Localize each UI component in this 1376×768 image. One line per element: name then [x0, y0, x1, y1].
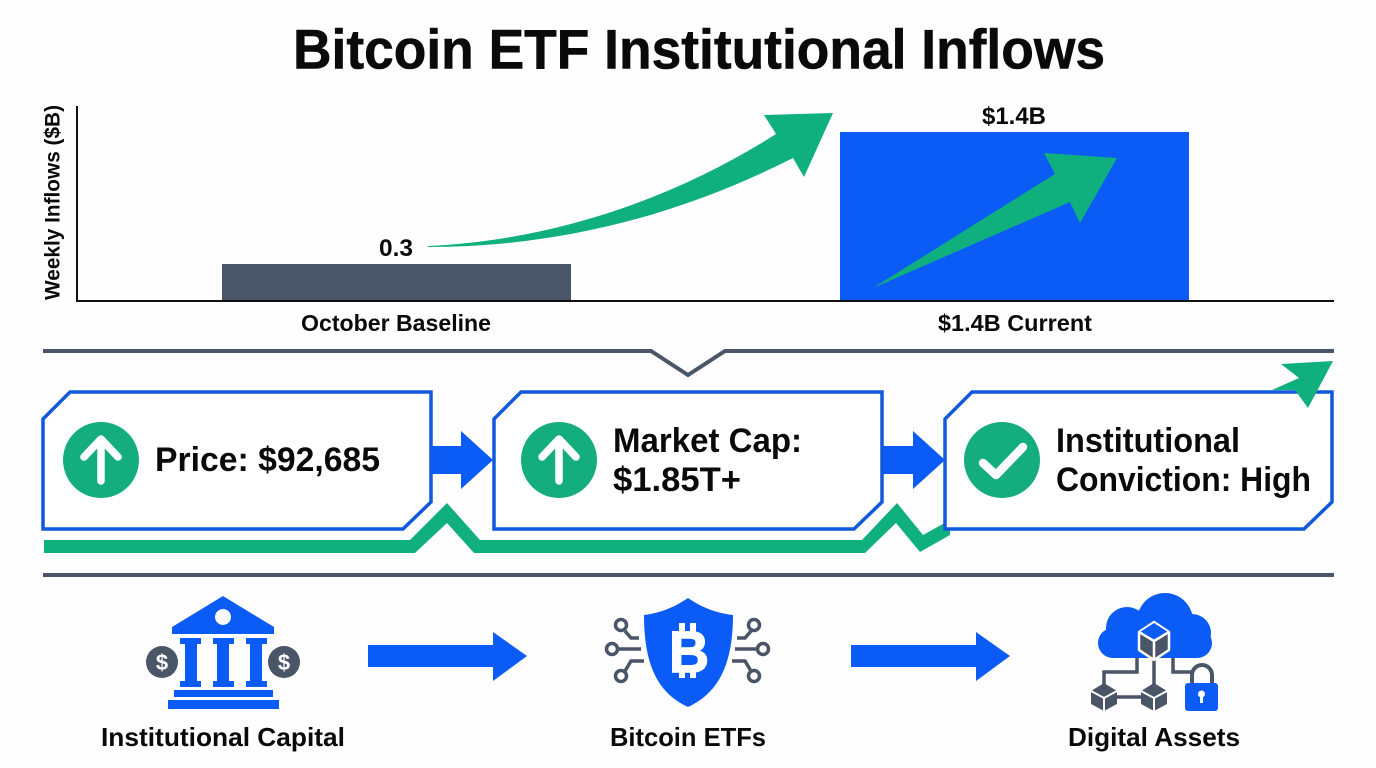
market cap text — [613, 422, 802, 499]
arrow: price to market cap — [431, 431, 493, 489]
arrow: trend arrowhead top right — [1272, 361, 1333, 408]
right cube — [1141, 683, 1167, 711]
icon: bitcoin shield — [606, 598, 768, 707]
price text: Price: $92,685 — [155, 441, 380, 479]
arrow: ETFs to digital assets — [851, 632, 1010, 681]
card outline — [494, 392, 882, 529]
icon: check mark — [964, 422, 1040, 498]
coin right — [268, 646, 300, 678]
shield — [644, 598, 733, 707]
panel: institutional conviction — [945, 392, 1332, 529]
category label: October Baseline: October Baseline — [301, 310, 491, 336]
icon: institutional bank with coins — [146, 596, 300, 709]
coin left: $ — [156, 650, 168, 675]
bar: current — [840, 132, 1189, 301]
category label: $1.4B Current: $1.4B Current — [938, 310, 1092, 336]
y axis label: Weekly Inflows ($B) — [42, 105, 64, 300]
bank steps — [168, 690, 279, 709]
bank columns — [180, 638, 267, 687]
bank roof — [172, 596, 274, 634]
conviction text: Institutional — [1056, 422, 1240, 460]
central cube — [1139, 622, 1169, 660]
arrow: curved growth arrow — [428, 113, 833, 247]
panel: market cap — [494, 392, 882, 529]
value label: $1.4B: $1.4B — [982, 103, 1046, 130]
label: Bitcoin ETFs: Bitcoin ETFs — [610, 722, 766, 752]
value label: 0.3: 0.3 — [379, 235, 413, 262]
card outline — [945, 392, 1332, 529]
market cap text: Market Cap: — [613, 422, 802, 460]
green trend line — [44, 503, 950, 553]
coin right: $ — [278, 650, 290, 675]
padlock — [1185, 665, 1218, 711]
left cube — [1091, 683, 1117, 711]
icon: up arrow — [63, 422, 139, 498]
card outline — [43, 392, 431, 529]
icon: up arrow — [521, 422, 597, 498]
conviction text — [1056, 422, 1311, 499]
panel: price — [43, 392, 431, 529]
bitcoin symbol: B — [669, 620, 709, 685]
bar: October baseline — [222, 264, 571, 301]
divider — [43, 573, 1334, 577]
conviction text: Conviction: High — [1056, 461, 1311, 499]
icon: digital assets cloud — [1091, 593, 1218, 711]
arrow: capital to ETFs — [368, 632, 527, 681]
connector lines — [1104, 658, 1192, 697]
arrow: market cap to conviction — [882, 431, 945, 489]
coin left — [146, 646, 178, 678]
divider with notch — [43, 351, 1334, 375]
circuit lines — [606, 620, 768, 682]
label: Digital Assets: Digital Assets — [1068, 722, 1240, 752]
chart axes — [77, 106, 1334, 301]
title: Bitcoin ETF Institutional Inflows — [293, 18, 1105, 80]
cloud — [1098, 593, 1212, 658]
label: Institutional Capital: Institutional Capital — [101, 722, 345, 752]
market cap text: $1.85T+ — [613, 461, 741, 499]
arrow: growth arrow inside bar — [873, 153, 1117, 288]
bar chart: weekly inflows — [42, 103, 1334, 336]
